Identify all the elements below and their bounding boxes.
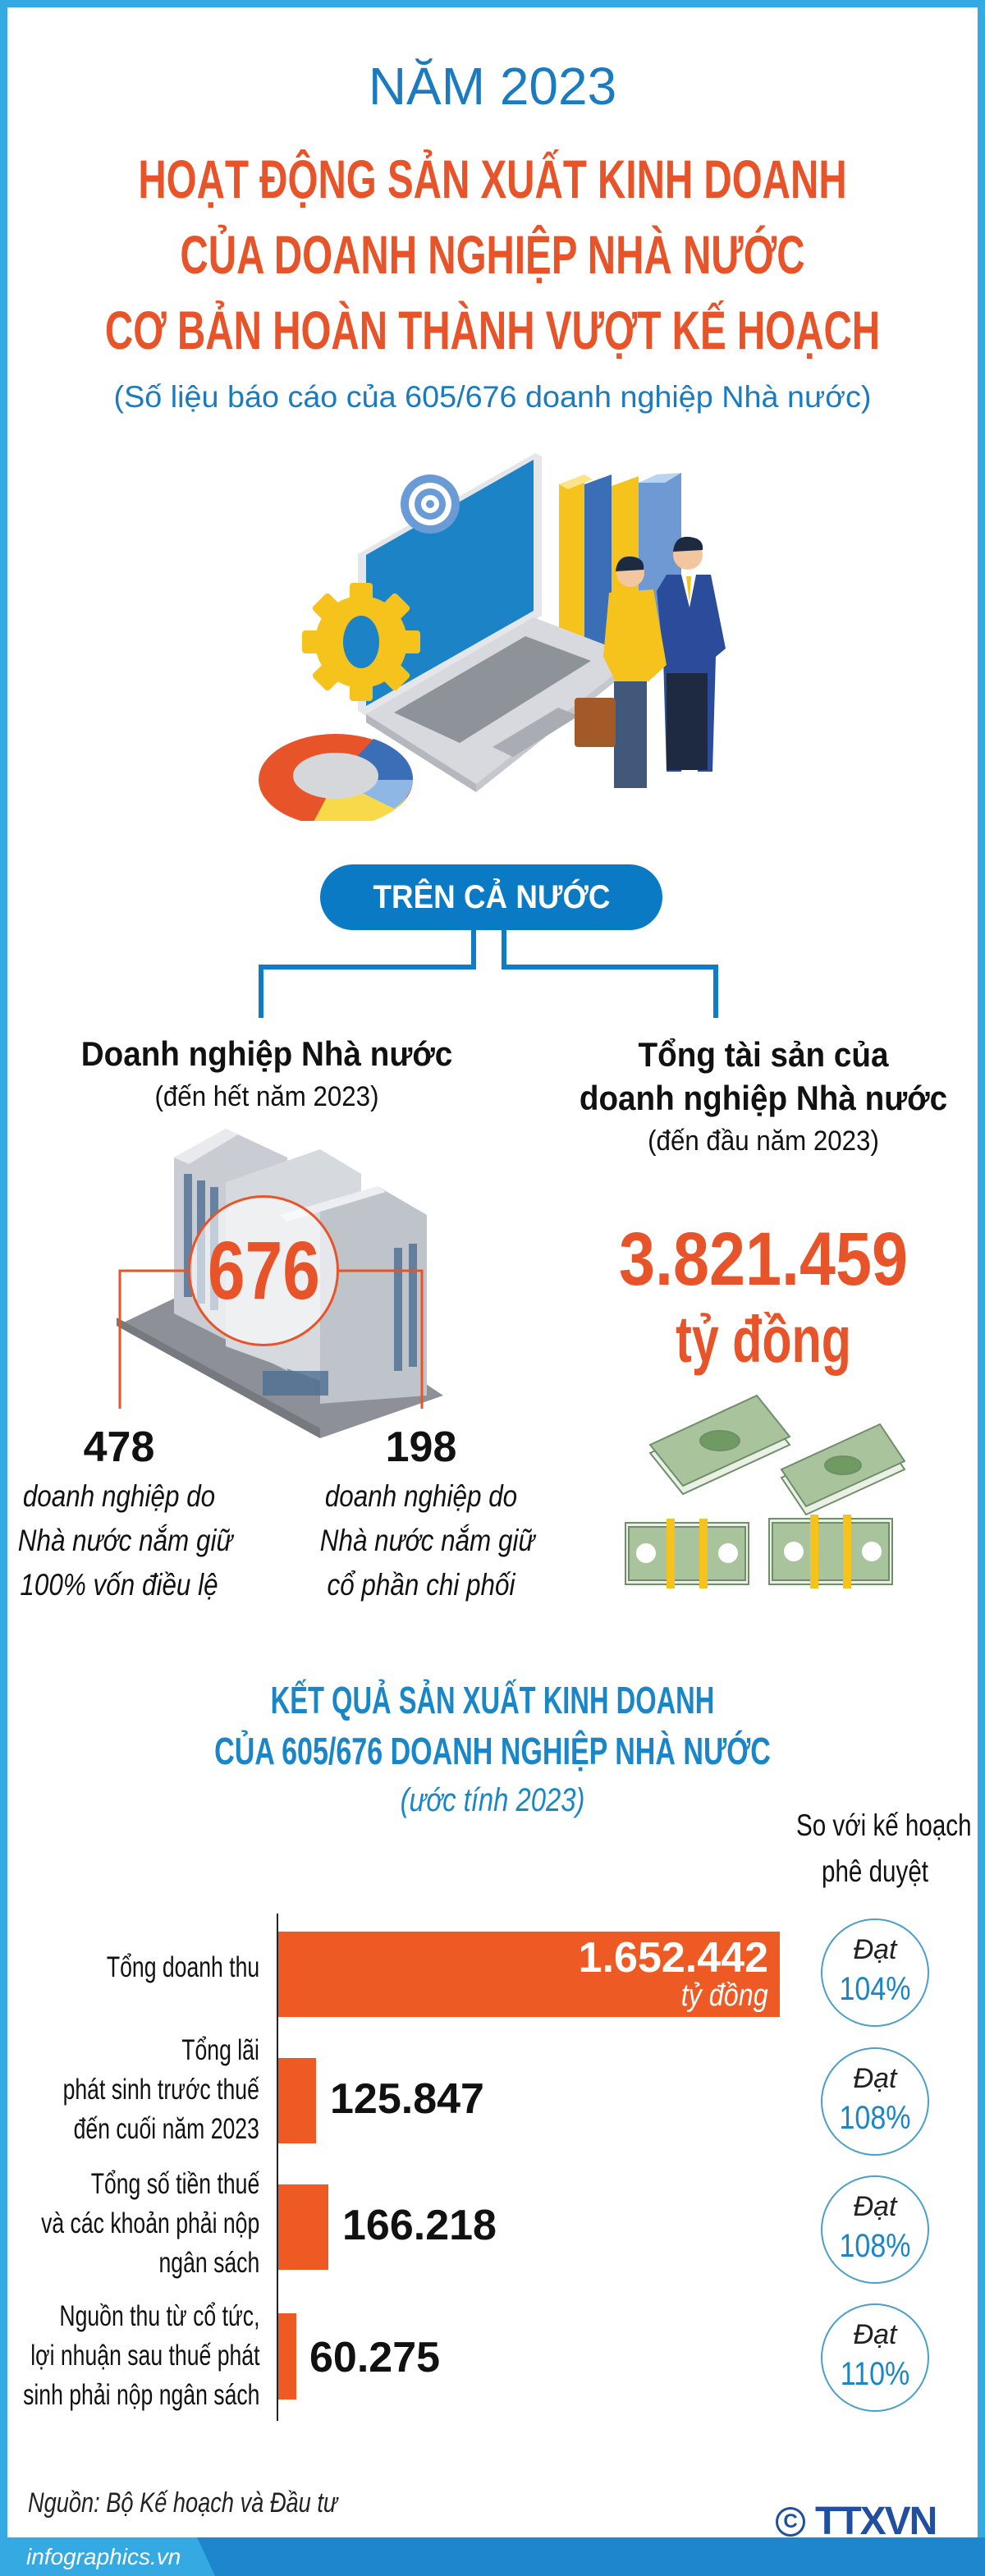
left heading: doanh nghiệp nhà nước: Doanh nghiệp Nhà nước [81, 1034, 452, 1073]
stat: 198: 198 [386, 1423, 456, 1471]
icon: target [401, 474, 460, 534]
callout: 676 circle [188, 1195, 339, 1346]
right heading: tổng tài sản: (đến đầu năm 2023) [648, 1125, 879, 1157]
label: tiền thuế: Tổng số tiền thuế [90, 2168, 259, 2200]
value: 166.218: 166.218 [342, 2202, 497, 2249]
label: tổng lãi: Tổng lãi [181, 2034, 259, 2066]
heading: year: NĂM 2023 [369, 57, 616, 116]
label: cổ tức: sinh phải nộp ngân sách [23, 2379, 259, 2411]
logo: TTXVN [776, 2500, 945, 2550]
column heading: so với kế hoạch: phê duyệt [822, 1854, 928, 1888]
badge: 110%: Đạt [854, 2319, 896, 2350]
value: 125.847: 125.847 [330, 2075, 484, 2123]
label: tiền thuế [41, 2168, 259, 2279]
label: tiền thuế: và các khoản phải nộp [41, 2207, 259, 2239]
badge: 108% tax: 108% [840, 2228, 910, 2264]
icon: businessman blue suit [657, 537, 726, 772]
illustration: laptop, gear, chart, businessmen [259, 453, 726, 821]
logo: TTXVN: C [783, 2510, 798, 2532]
label: cổ tức [23, 2300, 259, 2411]
footer bar [0, 2537, 985, 2576]
subtitle: (Số liệu báo cáo của 605/676 doanh nghiệp Nhà nước) [114, 380, 871, 414]
stat: total assets [619, 1217, 908, 1376]
callout: 676 circle: 676 [208, 1225, 319, 1317]
logo: TTXVN: Vietnam News Agency [858, 2541, 945, 2550]
right heading: tổng tài sản: Tổng tài sản của [639, 1035, 888, 1074]
label: cổ tức: Nguồn thu từ cổ tức, [59, 2300, 259, 2332]
pill: Trên cả nước [320, 864, 662, 930]
icon: businessman yellow jacket with briefcase [575, 557, 667, 788]
badge: 108% tax: Đạt [854, 2191, 896, 2222]
bar: tiền thuế [278, 2184, 328, 2270]
label: tổng lãi [63, 2034, 259, 2145]
icon: gear [302, 583, 420, 701]
icon: money stacks [625, 1394, 906, 1588]
stat: 198 [320, 1423, 537, 1602]
badge: 110% [821, 2303, 929, 2412]
title: CỦA DOANH NGHIỆP NHÀ NƯỚC [180, 224, 805, 285]
icon: donut chart [259, 734, 413, 827]
connector lines [259, 930, 718, 1018]
badge: 108%: 108% [840, 2100, 910, 2136]
column heading: so với kế hoạch: So với kế hoạch [796, 1808, 972, 1842]
right heading: tổng tài sản [580, 1035, 947, 1157]
left heading: doanh nghiệp nhà nước: (đến hết năm 2023) [154, 1081, 379, 1112]
badge: 104% [821, 1918, 929, 2027]
badge: 108% tax [821, 2175, 929, 2284]
column heading: so với kế hoạch [796, 1808, 972, 1888]
source note: Nguồn: Bộ Kế hoạch và Đầu tư [28, 2487, 337, 2519]
title: CƠ BẢN HOÀN THÀNH VƯỢT KẾ HOẠCH [105, 300, 880, 360]
left heading: doanh nghiệp nhà nước [81, 1034, 452, 1112]
label: tổng lãi: đến cuối năm 2023 [74, 2113, 259, 2145]
bar: tổng doanh thu [278, 1932, 780, 2017]
badge: 108%: Đạt [854, 2063, 896, 2094]
bracket lines orange [118, 1269, 424, 1409]
title: HOẠT ĐỘNG SẢN XUẤT KINH DOANH [138, 149, 847, 209]
stat: 198: Nhà nước nắm giữ [320, 1524, 534, 1557]
stat: 478: 478 [84, 1423, 154, 1471]
right heading: tổng tài sản: doanh nghiệp Nhà nước [580, 1079, 947, 1117]
footer bar: infographics.vn [26, 2544, 181, 2569]
stat: 198: cổ phần chi phối [327, 1568, 515, 1602]
logo: TTXVN: TTXVN [815, 2500, 936, 2543]
section heading: kết quả sản xuất kinh doanh: CỦA 605/676 DOANH NGHIỆP NHÀ NƯỚC [214, 1730, 771, 1772]
stat: total assets: tỷ đồng [676, 1303, 851, 1376]
title [105, 149, 880, 360]
badge: 104%: 104% [840, 1971, 910, 2007]
label: tiền thuế: ngân sách [158, 2247, 259, 2279]
stat: 478: doanh nghiệp do [23, 1479, 215, 1513]
bar chart [23, 1914, 780, 2421]
stat: 478: 100% vốn điều lệ [20, 1568, 218, 1602]
label: tổng doanh thu: Tổng doanh thu [107, 1951, 259, 1983]
pill: Trên cả nước: TRÊN CẢ NƯỚC [373, 879, 610, 915]
badge: 108% [821, 2047, 929, 2156]
stat: 478 [18, 1423, 235, 1602]
label: tổng lãi: phát sinh trước thuế [63, 2074, 259, 2106]
icon: building [117, 1129, 443, 1438]
stat: 198: doanh nghiệp do [325, 1479, 517, 1513]
bar: tổng lãi [278, 2058, 316, 2143]
stat: total assets: 3.821.459 [619, 1217, 908, 1301]
section heading: kết quả sản xuất kinh doanh [214, 1679, 771, 1818]
bar: tổng doanh thu: 1.652.442 [579, 1934, 768, 1982]
icon: laptop [358, 453, 636, 792]
section heading: kết quả sản xuất kinh doanh: (ước tính 2023) [401, 1782, 584, 1818]
bar: tổng doanh thu: tỷ đồng [681, 1978, 768, 2013]
value: 60.275: 60.275 [309, 2334, 440, 2381]
stat: 478: Nhà nước nắm giữ [18, 1524, 232, 1557]
icon: bar blocks [559, 473, 681, 667]
section heading: kết quả sản xuất kinh doanh: KẾT QUẢ SẢN XUẤT KINH DOANH [271, 1679, 714, 1721]
badge: 104%: Đạt [854, 1934, 896, 1965]
bar: cổ tức [278, 2313, 296, 2400]
badge: 110%: 110% [841, 2356, 909, 2392]
label: cổ tức: lợi nhuận sau thuế phát [30, 2340, 259, 2372]
